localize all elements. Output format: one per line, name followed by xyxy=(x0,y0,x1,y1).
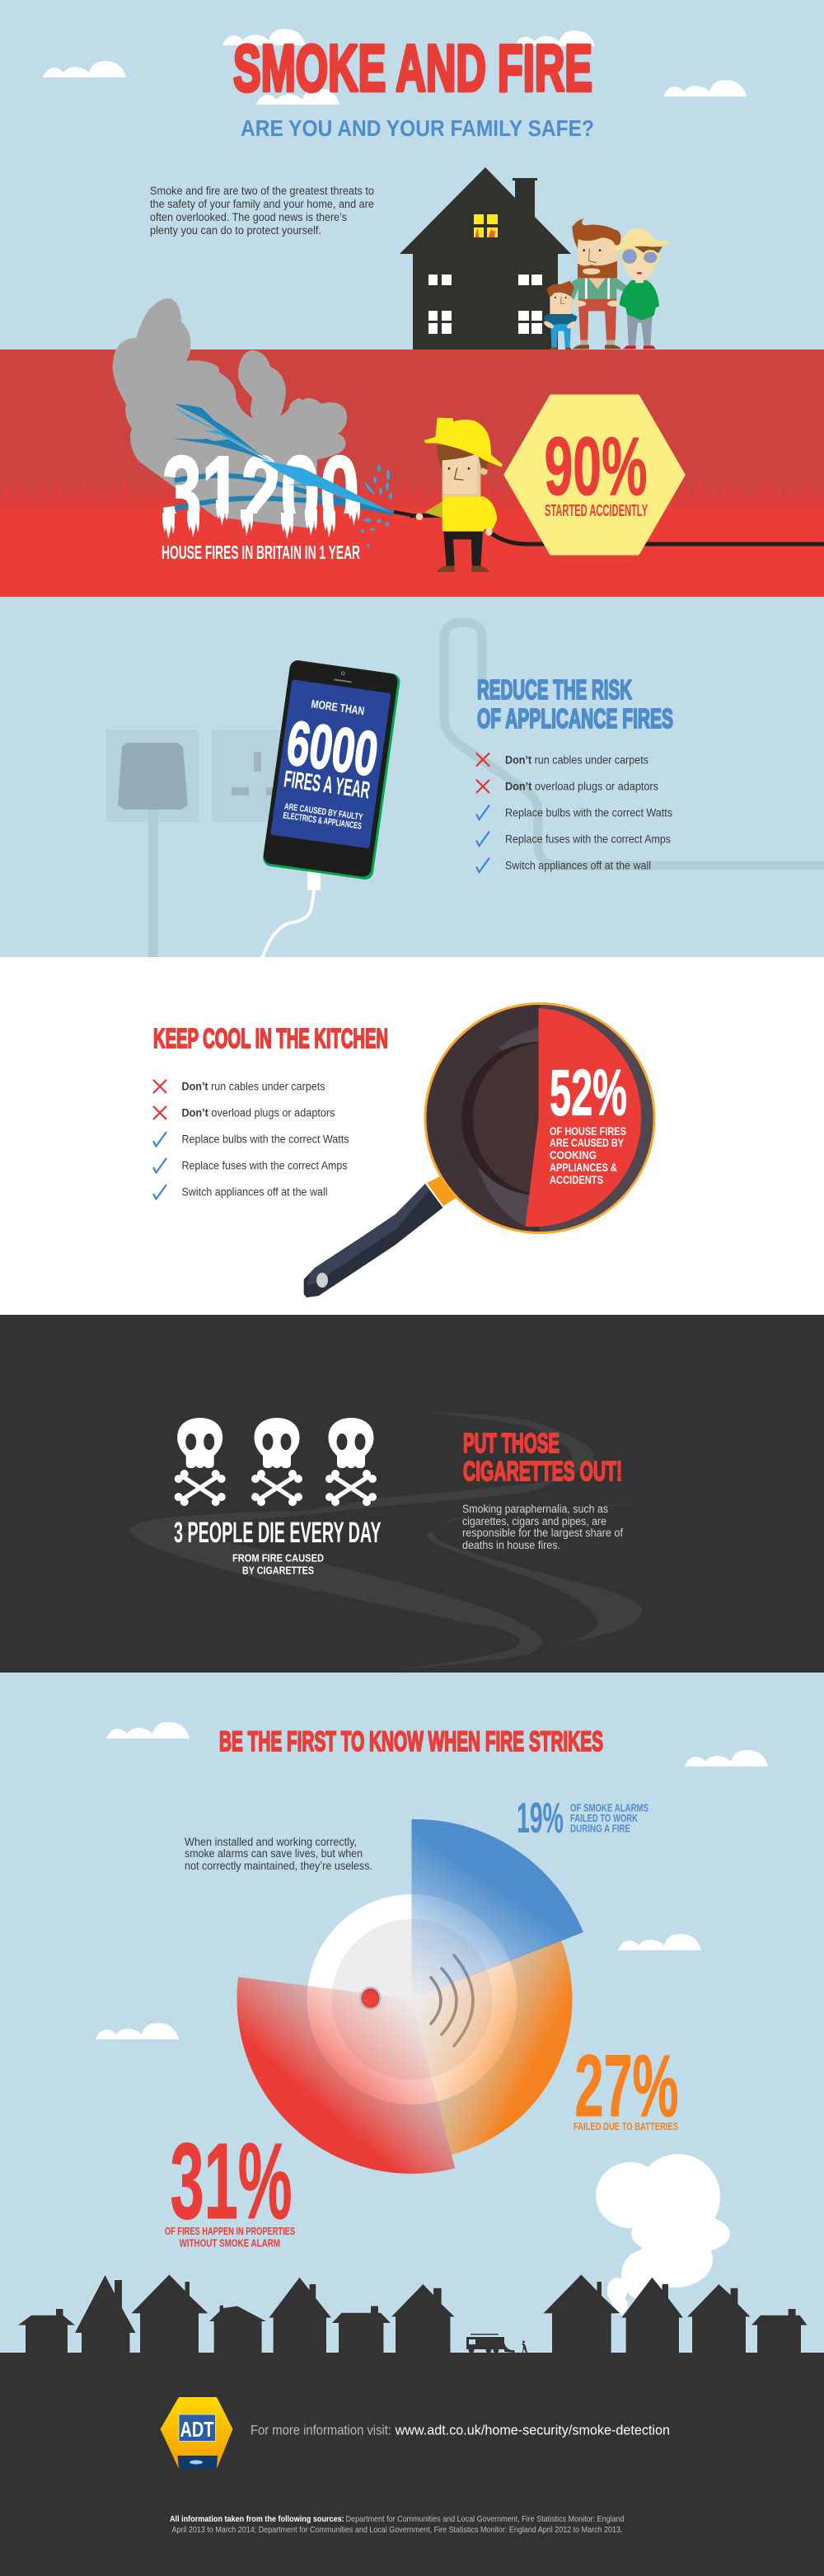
panel: cigarettes section background xyxy=(0,1315,824,1673)
alarm body xyxy=(307,1894,517,2104)
heading: reduce the risk: OF APPLICANCE FIRES xyxy=(477,703,673,734)
ADT logo: ADT xyxy=(180,2417,214,2442)
text: smoking paragraph: deaths in house fires. xyxy=(462,1539,560,1551)
checklist: kitchen tips: Replace fuses with the correct Amps xyxy=(181,1159,348,1172)
hose xyxy=(410,515,824,544)
stat: 19%: 19% xyxy=(517,1795,564,1842)
hexagon badge: 90%: 90% xyxy=(544,420,648,513)
title: SMOKE AND FIRE xyxy=(233,31,592,105)
checklist: appliance tips: Replace fuses with the correct Amps xyxy=(505,833,671,846)
stat: 31200 xyxy=(162,455,360,539)
phone screen: 6000 xyxy=(283,708,382,790)
intro text xyxy=(150,185,374,237)
stat: 27%: FAILED DUE TO BATTERIES xyxy=(574,2120,678,2133)
phone screen: MORE THAN xyxy=(311,697,365,717)
text: smoking paragraph: Smoking paraphernalia, such as xyxy=(462,1503,608,1515)
text: smoke alarms paragraph xyxy=(185,1836,372,1872)
text: smoke alarms paragraph: When installed and working correctly, xyxy=(185,1836,357,1848)
clouds around title xyxy=(43,29,747,105)
checklist: appliance tips: Don’t run cables under carpets xyxy=(505,753,648,767)
checklist: appliance tips: Switch appliances off at the wall xyxy=(505,859,651,872)
phone xyxy=(262,659,401,880)
sources: April 2013 to March 2014; Department for Communities and Local Government, Fire Statistics Monitor: England April 2012 to March 2013. xyxy=(171,2525,623,2535)
subtext: from fire caused by cigarettes xyxy=(232,1551,324,1576)
sector: orange 27% xyxy=(412,1940,573,2155)
checklist: kitchen tips xyxy=(153,1080,349,1199)
hexagon badge: 90% xyxy=(506,396,683,553)
phone screen: ELECTRICS & APPLIANCES xyxy=(283,810,362,832)
phone screen: ARE CAUSED BY FAULTY xyxy=(283,802,363,823)
lower windows xyxy=(428,274,542,334)
smoke ribbon xyxy=(129,1412,664,1671)
pan red segment with 52% xyxy=(526,1008,641,1227)
woman xyxy=(607,228,672,349)
checklist: appliance tips: Replace bulbs with the correct Watts xyxy=(505,806,672,819)
background cable xyxy=(444,622,824,866)
text: smoke alarms paragraph: smoke alarms can save lives, but when xyxy=(185,1847,363,1860)
call to action: For more information visit: xyxy=(250,2422,391,2438)
intro text: the safety of your family and your home, and are xyxy=(150,198,374,210)
heading: put those cigarettes out: CIGARETTES OUT! xyxy=(463,1456,622,1486)
heading: reduce the risk xyxy=(477,674,673,734)
sources: All information taken from the following sources: xyxy=(170,2514,344,2524)
pan red segment with 52%: ARE CAUSED BY xyxy=(550,1136,625,1149)
panel: smoke alarm section background xyxy=(0,1673,824,2357)
pan red segment with 52%: OF HOUSE FIRES xyxy=(550,1124,626,1138)
stat: 19%: OF SMOKE ALARMS xyxy=(570,1802,648,1814)
phone screen xyxy=(270,679,391,848)
phone screen: FIRES A YEAR xyxy=(283,766,372,805)
sources xyxy=(170,2514,625,2535)
family illustration xyxy=(543,218,672,350)
smoke alarm pie chart xyxy=(237,1819,583,2174)
frying pan xyxy=(304,1002,656,1297)
water stream behind number xyxy=(175,476,393,513)
intro text: Smoke and fire are two of the greatest threats to xyxy=(150,185,374,197)
pan red segment with 52%: ACCIDENTS xyxy=(550,1173,603,1186)
stat: 19%: DURING A FIRE xyxy=(570,1822,630,1835)
call to action: www.adt.co.uk/home-security/smoke-detection xyxy=(395,2422,670,2438)
subtitle: ARE YOU AND YOUR FAMILY SAFE? xyxy=(241,115,594,141)
checklist: kitchen tips: Don’t overload plugs or adaptors xyxy=(181,1106,335,1119)
stat: 31% xyxy=(165,2120,295,2249)
panel: footer xyxy=(0,2353,824,2576)
text: smoking paragraph: cigarettes, cigars and pipes, are xyxy=(462,1515,606,1527)
text: smoking paragraph xyxy=(462,1503,623,1551)
panel: kitchen section background xyxy=(0,957,824,1315)
pan red segment with 52%: 52% xyxy=(550,1055,627,1129)
hexagon badge: 90%: STARTED ACCIDENTLY xyxy=(545,502,648,520)
stat: 3 people die every day: 3 PEOPLE DIE EVERY DAY xyxy=(174,1517,381,1549)
stat: 19%: FAILED TO WORK xyxy=(570,1812,638,1824)
heading: put those cigarettes out xyxy=(463,1428,622,1486)
attic window with fire xyxy=(474,214,498,237)
heading: reduce the risk: REDUCE THE RISK xyxy=(477,674,632,705)
ADT logo xyxy=(160,2397,232,2469)
sound arcs xyxy=(431,1955,473,2046)
checklist: appliance tips: Don’t overload plugs or adaptors xyxy=(505,780,658,793)
stat: 27%: 27% xyxy=(575,2036,679,2135)
water jets xyxy=(173,404,393,547)
heading: keep cool in the kitchen: KEEP COOL IN THE KITCHEN xyxy=(153,1023,388,1053)
stat: 31%: 31% xyxy=(170,2120,292,2241)
checklist: kitchen tips: Replace bulbs with the correct Watts xyxy=(181,1133,349,1146)
boy xyxy=(543,281,578,350)
intro text: plenty you can do to protect yourself. xyxy=(150,224,321,237)
stat: 31%: WITHOUT SMOKE ALARM xyxy=(180,2237,280,2249)
sector: red 31% xyxy=(237,1977,455,2174)
man xyxy=(570,218,628,349)
smoke cloud xyxy=(113,298,347,528)
text: smoking paragraph: responsible for the largest share of xyxy=(462,1527,623,1539)
pan handle xyxy=(304,1176,456,1297)
stat: 31200: 31200 xyxy=(162,436,359,550)
checklist: kitchen tips: Switch appliances off at the wall xyxy=(181,1185,328,1199)
icons: three skulls xyxy=(175,1418,377,1506)
heading: put those cigarettes out: PUT THOSE xyxy=(463,1428,559,1458)
panel: red fire section xyxy=(0,350,824,597)
fire engine silhouette xyxy=(466,2334,527,2353)
house silhouettes skyline xyxy=(0,2274,824,2356)
pan red segment with 52%: APPLIANCES & xyxy=(550,1161,617,1174)
sector: blue 19% xyxy=(412,1819,583,1999)
sources: Department for Communities and Local Government, Fire Statistics Monitor: England xyxy=(346,2514,625,2524)
panel: appliance section background xyxy=(0,597,824,957)
subtext: from fire caused by cigarettes: FROM FIRE CAUSED xyxy=(232,1551,324,1565)
checklist: kitchen tips: Don’t run cables under carpets xyxy=(181,1080,325,1093)
charger cable xyxy=(262,871,321,959)
clouds xyxy=(96,1722,768,2039)
wall socket and plug xyxy=(106,730,304,957)
subtext: from fire caused by cigarettes: BY CIGARETTES xyxy=(242,1565,314,1576)
pan red segment with 52%: COOKING xyxy=(550,1148,597,1161)
house illustration xyxy=(400,167,571,350)
intro text: often overlooked. The good news is there’s xyxy=(150,211,347,223)
checklist: appliance tips xyxy=(476,753,672,872)
text: smoke alarms paragraph: not correctly maintained, they’re useless. xyxy=(185,1860,372,1872)
firefighter xyxy=(394,418,503,572)
stat: 31%: OF FIRES HAPPEN IN PROPERTIES xyxy=(165,2225,295,2237)
call to action xyxy=(250,2422,670,2438)
stat: 27% xyxy=(574,2036,679,2135)
stat: 19% xyxy=(517,1795,648,1842)
label: house fires in britain: HOUSE FIRES IN BRITAIN IN 1 YEAR xyxy=(162,542,360,563)
white smoke plume xyxy=(596,2154,730,2315)
panel: sky header background xyxy=(0,0,824,350)
